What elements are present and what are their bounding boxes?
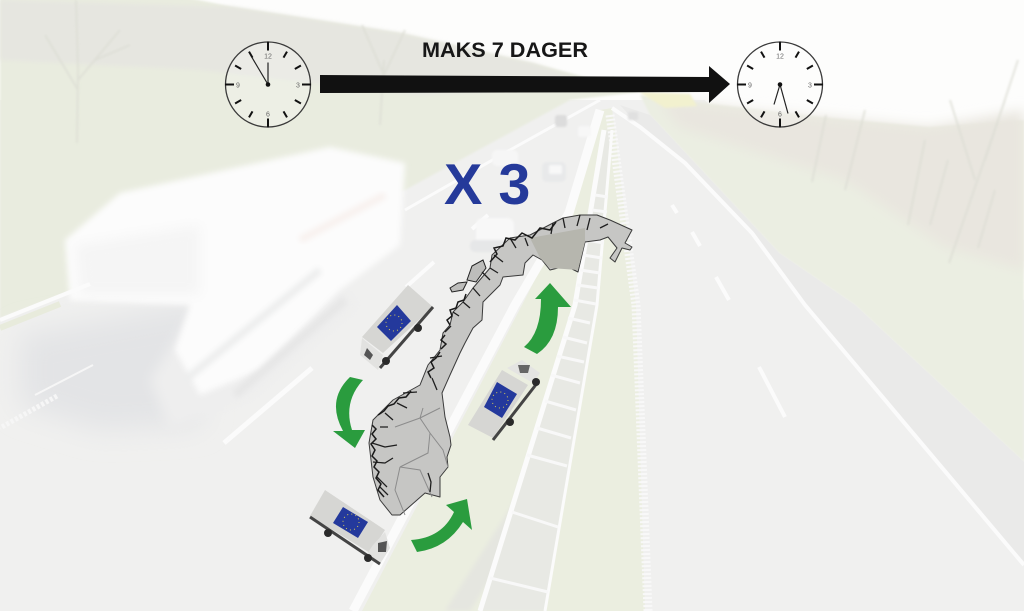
lane stripes near truck: [0, 365, 93, 428]
truck: upper left: [360, 285, 433, 370]
yellow field patch: [639, 92, 697, 108]
region borders: [395, 408, 448, 515]
blurred truck smear: [20, 300, 210, 430]
Finnmark shading: [530, 228, 585, 270]
icon: end clock: 3: [808, 82, 812, 90]
icon: end clock: 9: [748, 82, 752, 90]
heading: x 3: X 3: [444, 153, 530, 217]
icon: start clock: 3: [296, 82, 300, 90]
icon: end clock: 6: [778, 112, 782, 118]
icon: start clock: 9: [236, 82, 240, 90]
icon: end clock: [737, 42, 823, 128]
right shoulder: [620, 105, 1024, 565]
right verge and trees: [640, 95, 1024, 462]
map of Norway: [369, 215, 632, 515]
bare trees: [45, 0, 1018, 263]
arrow: green up: [524, 283, 571, 354]
truck: bottom: [310, 490, 390, 564]
icon: end clock: 12: [776, 54, 784, 60]
median strip: [362, 108, 645, 611]
road markings: [612, 108, 1024, 565]
icon: start clock: 6: [266, 112, 270, 118]
hillside and left grass: [0, 0, 640, 318]
arrow: green down: [333, 377, 365, 448]
heading: maks 7 dager: MAKS 7 DAGER: [422, 38, 588, 62]
icon: start clock: [225, 42, 311, 128]
distant cars: [470, 112, 638, 252]
blurred truck: [65, 147, 405, 430]
arrow: timeline: [320, 66, 730, 103]
guard rail ladder: [480, 130, 612, 611]
icon: start clock: 12: [264, 54, 272, 60]
truck: right: [468, 360, 540, 440]
arrow: green bottom curve: [411, 499, 472, 552]
Lofoten islands: [450, 260, 486, 292]
left guard rail: [0, 284, 90, 328]
west coast skerries: [371, 222, 556, 497]
fjords and coast detail: [372, 215, 608, 495]
